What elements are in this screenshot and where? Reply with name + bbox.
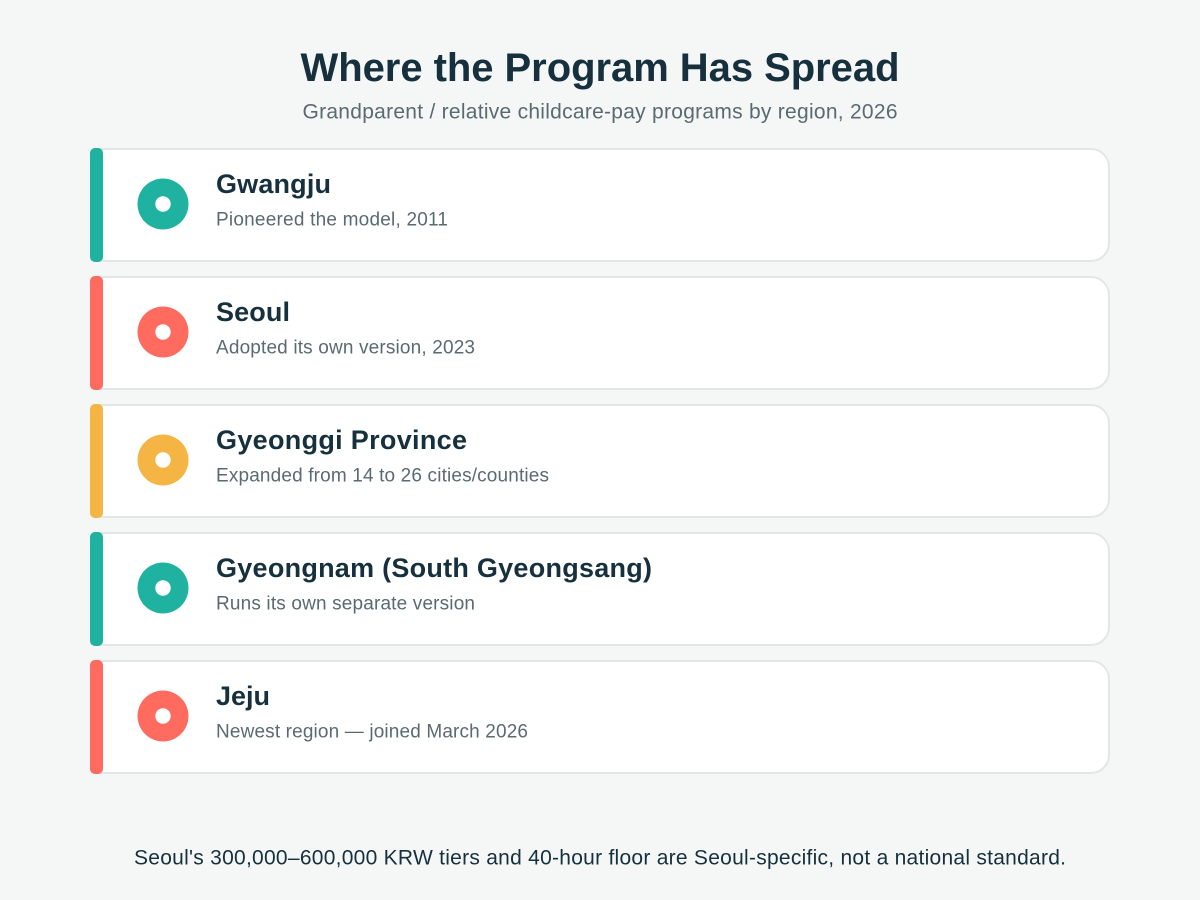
region name: Gyeongnam: Gyeongnam (South Gyeongsang) xyxy=(216,553,652,583)
accent bar: Gyeongnam xyxy=(90,532,103,646)
icon: Gwangju marker xyxy=(138,178,188,230)
icon: Jeju marker xyxy=(138,690,188,742)
icon: Seoul marker xyxy=(138,306,188,358)
description: Gyeongnam: Runs its own separate version xyxy=(216,594,475,615)
panel: Gyeonggi Province xyxy=(90,404,1109,518)
footnote: Seoul's 300,000–600,000 KRW tiers and 40-hour floor are Seoul-specific, not a national standard. xyxy=(134,846,1066,870)
icon: Gyeonggi Province marker xyxy=(138,434,188,486)
region name: Jeju: Jeju xyxy=(216,681,270,711)
panel: Gyeongnam xyxy=(90,532,1109,646)
accent bar: Gyeonggi Province xyxy=(90,404,103,518)
region name: Gyeonggi Province: Gyeonggi Province xyxy=(216,425,467,455)
panel: Seoul xyxy=(90,276,1109,390)
panel: Gwangju xyxy=(90,148,1109,262)
icon: Gyeongnam marker xyxy=(138,562,188,614)
region name: Gwangju: Gwangju xyxy=(216,169,331,199)
description: Jeju: Newest region — joined March 2026 xyxy=(216,722,528,743)
accent bar: Seoul xyxy=(90,276,103,390)
description: Gyeonggi Province: Expanded from 14 to 26 cities/counties xyxy=(216,466,549,487)
panel: Jeju xyxy=(90,660,1109,774)
description: Seoul: Adopted its own version, 2023 xyxy=(216,338,475,359)
description: Gwangju: Pioneered the model, 2011 xyxy=(216,210,448,231)
title: Where the Program Has Spread xyxy=(300,46,900,90)
accent bar: Gwangju xyxy=(90,148,103,262)
accent bar: Jeju xyxy=(90,660,103,774)
region name: Seoul: Seoul xyxy=(216,297,290,327)
subtitle: Grandparent / relative childcare-pay programs by region, 2026 xyxy=(302,100,898,124)
